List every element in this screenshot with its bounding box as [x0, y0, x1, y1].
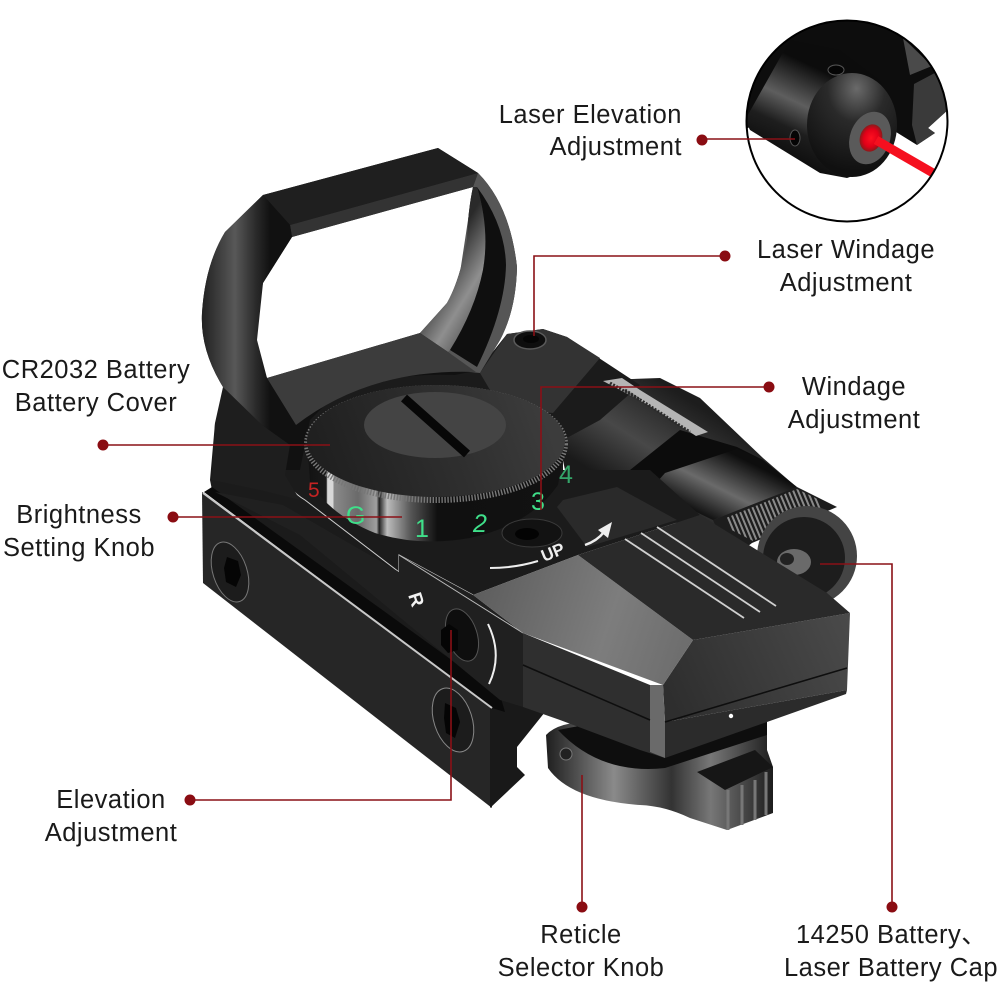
callout: Laser Windage Adjustment	[534, 236, 935, 336]
laser module housing	[553, 378, 800, 530]
callout: Reticle Selector Knob: Reticle	[540, 921, 622, 949]
callout: Brightness Setting Knob: Brightness	[16, 501, 142, 529]
reticle selector knob	[546, 722, 773, 830]
callout: Windage Adjustment	[541, 373, 920, 510]
callout: CR2032 Battery Cover: Battery Cover	[15, 389, 177, 417]
knob numerals: 2	[472, 510, 487, 538]
callout: Brightness Setting Knob	[3, 501, 402, 562]
callout: Laser Elevation Adjustment	[499, 101, 795, 161]
callout: CR2032 Battery Cover: CR2032 Battery	[2, 356, 190, 384]
callout: Reticle Selector Knob	[498, 775, 664, 982]
open reflex hood	[202, 148, 517, 500]
callout: Laser Elevation Adjustment: Adjustment	[549, 133, 682, 161]
front block ridged top	[578, 515, 850, 640]
laser cap knurled ring and battery cap	[713, 487, 857, 606]
callout: 14250 Battery, Laser Battery Cap	[784, 564, 998, 982]
callout: 14250 Battery, Laser Battery Cap: Laser Battery Cap	[784, 954, 998, 982]
callout: Brightness Setting Knob: Setting Knob	[3, 534, 155, 562]
hex screw: elevation	[425, 683, 481, 757]
windage screw and UP arrow marking: UP	[538, 539, 567, 566]
callout: Elevation Adjustment	[45, 630, 451, 847]
windage screw and UP arrow marking	[490, 519, 612, 568]
knob numerals	[308, 461, 573, 543]
knob numerals: 3	[531, 488, 545, 516]
brightness setting knob side band	[307, 440, 566, 542]
mount side plate with R marking	[215, 492, 523, 707]
hex screw: rail left	[204, 537, 256, 607]
callout: Windage Adjustment: Adjustment	[788, 406, 920, 434]
knurled battery cover dial	[307, 385, 565, 500]
callout: Laser Windage Adjustment: Laser Windage	[757, 236, 935, 264]
inset: laser module close-up	[740, 10, 950, 222]
callout: Reticle Selector Knob: Selector Knob	[498, 954, 664, 982]
knob numerals: 1	[415, 515, 429, 543]
mount side plate with R marking: R	[403, 590, 428, 610]
callout: CR2032 Battery Cover	[2, 356, 330, 450]
knob numerals: 5	[308, 479, 320, 502]
callout: Laser Elevation Adjustment: Laser Elevation	[499, 101, 682, 129]
panel: red dot sight product drawing	[202, 148, 857, 830]
front block lower body	[523, 613, 850, 758]
front block top light facet	[473, 555, 693, 685]
main body top surface	[210, 329, 700, 700]
mount rail	[202, 487, 545, 808]
callout: Elevation Adjustment: Adjustment	[45, 819, 177, 847]
knob numerals: G	[346, 502, 365, 530]
hex screw: windage side	[439, 605, 485, 665]
callout: Elevation Adjustment: Elevation	[56, 786, 166, 814]
knob numerals: 4	[559, 461, 573, 489]
laser warning label	[603, 378, 708, 436]
callout: 14250 Battery, Laser Battery Cap: 14250 Battery、	[796, 921, 987, 949]
callout: Laser Windage Adjustment: Adjustment	[780, 269, 912, 297]
callout: Windage Adjustment: Windage	[802, 373, 906, 401]
screw: laser windage adjustment	[514, 331, 546, 349]
